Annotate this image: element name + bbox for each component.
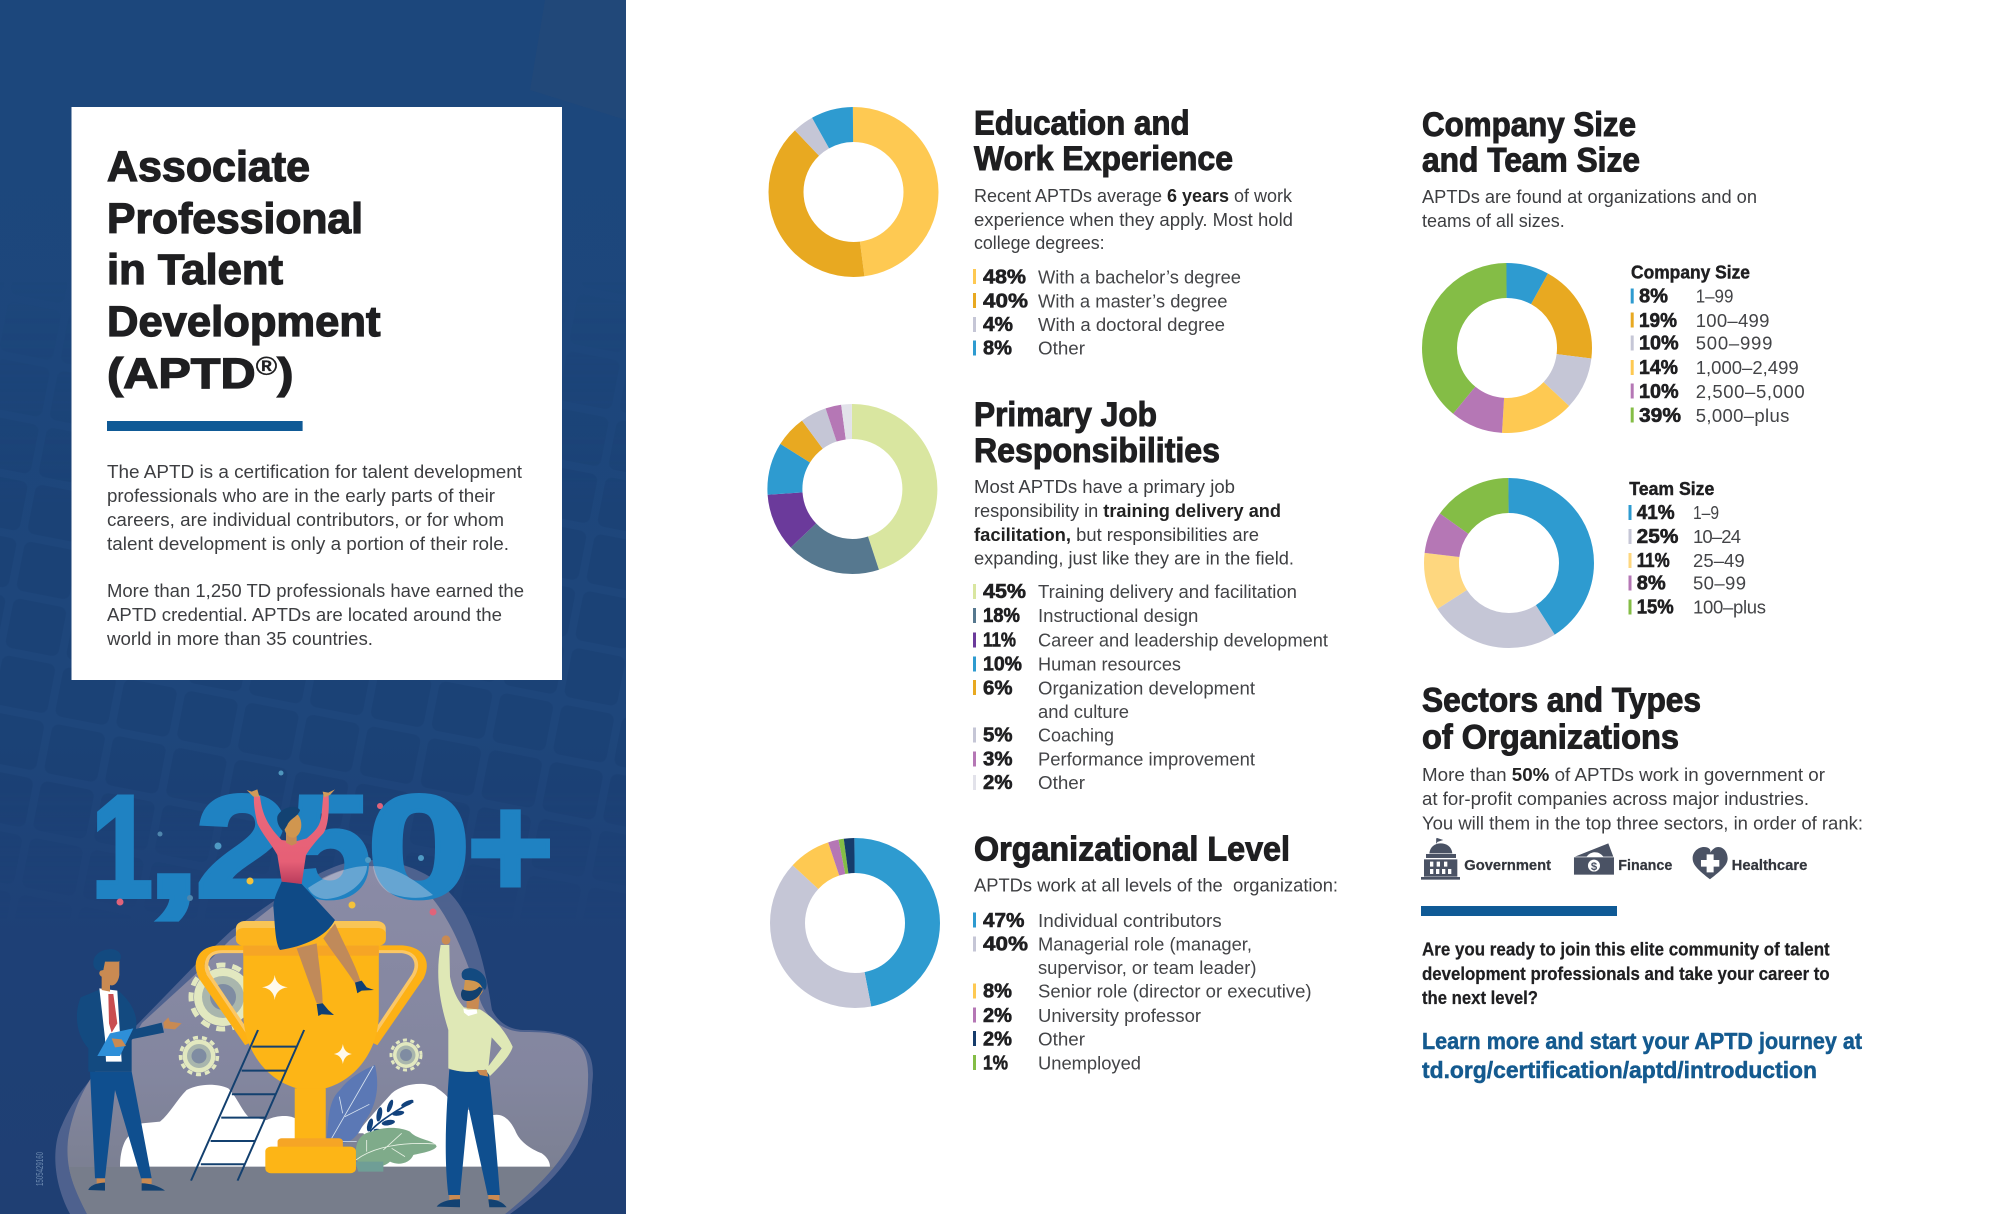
description: [974, 476, 1294, 568]
legend: company size: 14%: [1639, 357, 1678, 379]
panel: left blue sidebar: [0, 0, 626, 1214]
light overlap shapes: [308, 866, 433, 899]
trophy: [200, 921, 422, 1173]
heading: Education and: [974, 104, 1190, 142]
description: [1422, 764, 1863, 833]
label: government: Government: [1464, 858, 1551, 874]
title: [107, 143, 380, 398]
call to action question: the next level?: [1422, 987, 1538, 1008]
description: at for-profit companies across major industries.: [1422, 788, 1809, 809]
legend: 48%: [983, 266, 1026, 288]
big number 1,250+: [91, 765, 554, 928]
background blob: [55, 860, 593, 1214]
section: company size and team size: [1422, 106, 1805, 630]
legend: 6%: [983, 678, 1013, 700]
legend: With a master’s degree: [1038, 290, 1228, 312]
heading: Work Experience: [974, 140, 1233, 178]
description: expanding, just like they are in the field.: [974, 548, 1294, 568]
legend: team size: 1–9: [1693, 502, 1719, 523]
donut: responsibilities: [785, 422, 920, 556]
legend: team size: Team Size: [1629, 478, 1714, 499]
heading: [974, 396, 1220, 470]
legend: company size: 500–999: [1696, 333, 1772, 354]
legend: 8%: [983, 338, 1012, 360]
legend: [973, 581, 1328, 794]
description: responsibility in training delivery and: [974, 500, 1281, 521]
legend: team size: 8%: [1637, 572, 1666, 594]
donut: company size: [1440, 280, 1574, 416]
legend: Unemployed: [1038, 1052, 1141, 1074]
title: (APTD: [107, 350, 238, 398]
intro text: professionals who are in the early parts of their: [107, 485, 495, 506]
legend: Training delivery and facilitation: [1038, 581, 1297, 602]
big number 1,250+: ,: [146, 765, 201, 928]
legend: 40%: [983, 290, 1028, 312]
donut: team size: [1442, 496, 1576, 630]
legend: With a bachelor’s degree: [1038, 266, 1241, 288]
big number 1,250+: +: [467, 765, 554, 928]
call to action link: td.org/certification/aptd/introduction: [1422, 1057, 1817, 1083]
legend: company size: 39%: [1639, 405, 1681, 427]
legend: company size: 8%: [1639, 286, 1668, 308]
description: Recent APTDs average 6 years of work: [974, 185, 1293, 206]
title: Development: [107, 298, 380, 346]
left gear: [180, 1038, 218, 1074]
art credit: 1505429160: [35, 1152, 46, 1186]
legend: Other: [1038, 1028, 1085, 1050]
description: Most APTDs have a primary job: [974, 476, 1235, 497]
legend: 2%: [983, 1028, 1012, 1050]
legend: Performance improvement: [1038, 748, 1255, 770]
legend: team size: 10–24: [1693, 526, 1741, 547]
description: teams of all sizes.: [1422, 210, 1565, 231]
woman on trophy: [247, 789, 374, 1016]
description: You will them in the top three sectors, in order of rank:: [1422, 812, 1863, 833]
legend: company size: Company Size: [1631, 262, 1750, 283]
man right: [437, 935, 513, 1207]
legend: Other: [1038, 338, 1085, 358]
legend: company size: 1,000–2,499: [1696, 357, 1799, 378]
legend: team size: 11%: [1637, 550, 1670, 572]
legend: 2%: [983, 772, 1013, 794]
legend: Organization development: [1038, 678, 1255, 698]
legend: [973, 266, 1241, 360]
large gear: [191, 965, 255, 1029]
legend: and culture: [1038, 701, 1129, 722]
heading: Responsibilities: [974, 432, 1220, 470]
icon: finance: [1574, 843, 1614, 875]
legend: Other: [1038, 772, 1085, 793]
heading: [974, 104, 1233, 178]
donut: organizational level: [788, 856, 922, 990]
legend: company size: 10%: [1639, 333, 1679, 355]
call to action link: Learn more and start your APTD journey at: [1422, 1028, 1862, 1054]
right gear: [391, 1040, 421, 1070]
legend: supervisor, or team leader): [1038, 957, 1256, 978]
legend: company size: 10%: [1639, 381, 1679, 403]
heading: Sectors and Types: [1422, 682, 1701, 720]
legend: company size: 5,000–plus: [1696, 405, 1789, 426]
description: APTDs are found at organizations and on: [1422, 186, 1757, 207]
donut: education: [786, 124, 921, 260]
legend: Instructional design: [1038, 605, 1198, 626]
intro text: More than 1,250 TD professionals have earned the: [107, 580, 524, 601]
legend: team size: 50–99: [1693, 572, 1746, 594]
legend: 8%: [983, 981, 1012, 1003]
description: college degrees:: [974, 232, 1105, 253]
clouds: [120, 1084, 550, 1167]
big number 1,250+: 5: [290, 765, 371, 928]
big number 1,250+: 1: [91, 765, 153, 928]
section: education and work experience: [786, 104, 1293, 360]
intro text: The APTD is a certification for talent development: [107, 461, 522, 482]
title: Associate: [107, 143, 310, 191]
sparkles: [262, 975, 352, 1064]
legend: 1%: [983, 1052, 1008, 1074]
call to action question: development professionals and take your career to: [1422, 963, 1830, 984]
intro text: APTD credential. APTDs are located around the: [107, 604, 502, 625]
legend: team size: [1628, 478, 1766, 618]
heading: and Team Size: [1422, 142, 1640, 180]
legend: 3%: [983, 748, 1013, 770]
title: ®: [256, 351, 277, 381]
legend: 4%: [983, 314, 1013, 336]
heading: [1422, 682, 1701, 756]
legend: team size: 41%: [1637, 502, 1675, 524]
heading: Organizational Level: [974, 830, 1290, 868]
legend: team size: 15%: [1637, 596, 1674, 618]
intro text: world in more than 35 countries.: [106, 628, 373, 649]
big number 1,250+: 2: [195, 765, 290, 928]
legend: Managerial role (manager,: [1038, 934, 1252, 954]
legend: 18%: [983, 605, 1020, 627]
title: in Talent: [107, 246, 283, 294]
intro text: careers, are individual contributors, or for whom: [107, 509, 504, 530]
legend: company size: 2,500–5,000: [1696, 381, 1805, 402]
icon: healthcare: [1693, 847, 1728, 879]
legend: 2%: [983, 1005, 1012, 1027]
section: organizational level: [788, 830, 1338, 1074]
legend: With a doctoral degree: [1038, 314, 1225, 335]
ladder: [191, 1030, 304, 1181]
heading: [1422, 106, 1640, 180]
legend: Coaching: [1038, 724, 1114, 746]
legend: company size: 1–99: [1696, 286, 1733, 307]
label: healthcare: Healthcare: [1732, 858, 1807, 874]
title: Professional: [107, 195, 363, 243]
description: [1422, 186, 1757, 231]
illustration: trophy and team: [36, 770, 593, 1214]
label: finance: Finance: [1618, 858, 1672, 874]
legend: company size: 19%: [1639, 310, 1677, 332]
legend: team size: 100–plus: [1693, 596, 1766, 618]
confetti dots: [116, 770, 436, 916]
call to action question: [1422, 939, 1830, 1008]
panel: intro card: [72, 107, 562, 680]
description: facilitation, but responsibilities are: [974, 524, 1259, 545]
description: APTDs work at all levels of the organization:: [974, 874, 1338, 896]
legend: University professor: [1038, 1005, 1201, 1026]
legend: [973, 910, 1312, 1074]
legend: company size: 100–499: [1696, 310, 1769, 331]
legend: Individual contributors: [1038, 910, 1222, 931]
intro text: [106, 461, 524, 649]
legend: Career and leadership development: [1038, 630, 1328, 650]
legend: 11%: [983, 630, 1016, 652]
title: ): [277, 350, 294, 398]
heading: of Organizations: [1422, 718, 1679, 756]
legend: team size: 25–49: [1693, 550, 1745, 571]
legend: 40%: [983, 934, 1028, 956]
description: More than 50% of APTDs work in government or: [1422, 764, 1825, 785]
heading: Primary Job: [974, 396, 1157, 434]
description: experience when they apply. Most hold: [974, 209, 1293, 230]
plants: [327, 1065, 437, 1172]
description: [974, 185, 1293, 253]
icon: government: [1421, 838, 1460, 880]
call to action link: [1422, 1028, 1862, 1083]
legend: Human resources: [1038, 654, 1181, 674]
intro text: talent development is only a portion of their role.: [107, 533, 509, 554]
legend: 5%: [983, 724, 1013, 746]
legend: company size: [1631, 262, 1805, 427]
legend: 47%: [983, 910, 1025, 932]
legend: 45%: [983, 581, 1026, 603]
legend: 10%: [983, 654, 1022, 676]
big number 1,250+: 0: [367, 765, 471, 928]
icon: finance: $: [1591, 861, 1598, 873]
legend: team size: 25%: [1637, 526, 1679, 548]
man left: [77, 949, 182, 1191]
section: sectors and types of organizations: [1421, 682, 1863, 1083]
call to action question: Are you ready to join this elite community of talent: [1422, 939, 1830, 960]
section: primary job responsibilities: [785, 396, 1328, 794]
legend: Senior role (director or executive): [1038, 981, 1312, 1002]
heading: Company Size: [1422, 106, 1636, 144]
